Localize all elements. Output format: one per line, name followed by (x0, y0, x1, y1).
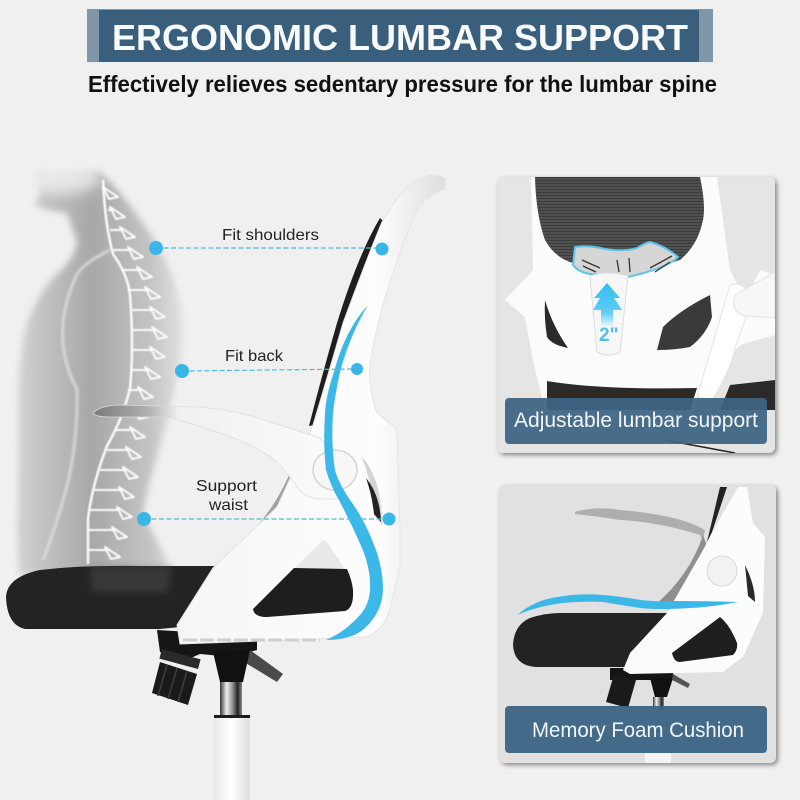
seat cushion (513, 613, 667, 667)
main office chair, side view (6, 175, 445, 800)
subtitle: Effectively relieves sedentary pressure for the lumbar spine (88, 71, 717, 97)
right arm joint (696, 284, 746, 398)
seat/spine overlay (90, 566, 172, 592)
pivot (707, 556, 737, 586)
title text: ERGONOMIC LUMBAR SUPPORT (112, 17, 688, 58)
2 inch mark: 2" (599, 325, 619, 346)
label text: Memory Foam Cushion (532, 719, 744, 742)
pole (645, 753, 671, 763)
frame hole background (253, 540, 353, 617)
chrome column (653, 697, 664, 706)
back window (361, 456, 382, 525)
spinal column (88, 180, 132, 564)
right window (657, 295, 712, 350)
hub (650, 680, 672, 697)
callout: support waist: waist (208, 497, 249, 514)
under-seat base (610, 668, 673, 680)
arm contour (43, 250, 110, 560)
label text: Adjustable lumbar support (514, 409, 758, 432)
grey arm (575, 508, 705, 540)
lever (244, 650, 283, 682)
panel background (499, 485, 776, 763)
pad ribs (582, 256, 672, 272)
seat cushion (6, 566, 356, 629)
up arrow (593, 283, 622, 326)
callout: fit shoulders (149, 227, 388, 256)
back mesh edge (309, 218, 384, 426)
armrest (93, 405, 345, 499)
frame bottom ribs (183, 638, 320, 642)
white frame (623, 487, 765, 674)
title banner (87, 9, 713, 62)
white frame (177, 175, 445, 644)
chrome column (220, 682, 242, 718)
left window (545, 300, 568, 348)
human body with spine (17, 162, 183, 575)
mesh sliver (707, 487, 727, 542)
white pole (214, 715, 250, 800)
lever (672, 674, 690, 688)
right seat edge (720, 380, 775, 410)
cord (665, 440, 735, 453)
grey arm support (218, 470, 296, 566)
blue spine ribbon (324, 305, 383, 640)
label bar (505, 706, 767, 753)
head fade (18, 162, 102, 194)
under-seat mechanism (157, 630, 257, 660)
callout: support waist: Support (196, 478, 258, 495)
callout: fit back (175, 348, 363, 378)
hub (213, 650, 250, 682)
tilt knob (152, 649, 201, 705)
arm hinge (734, 272, 775, 318)
lumbar pad (573, 242, 678, 277)
callout: support waist (137, 478, 396, 526)
white backrest frame (505, 177, 775, 420)
frame hole seat mesh (253, 568, 353, 617)
callout: fit shoulders: Fit shoulders (222, 227, 319, 244)
grey support (659, 536, 706, 610)
label bar (505, 398, 767, 444)
arm pivot (313, 450, 357, 490)
mesh back (535, 177, 704, 263)
blue wave (517, 594, 738, 615)
callout: fit back: Fit back (225, 348, 284, 365)
lower seat mesh (547, 381, 697, 410)
slider (590, 273, 628, 355)
back window (745, 565, 755, 602)
panel background (497, 177, 775, 453)
hole with seat mesh (672, 617, 737, 662)
panel: adjustable lumbar support (497, 177, 775, 453)
knob (606, 680, 636, 706)
vertebrae (88, 187, 167, 559)
body silhouette (17, 172, 183, 575)
panel: memory foam cushion (499, 485, 776, 763)
